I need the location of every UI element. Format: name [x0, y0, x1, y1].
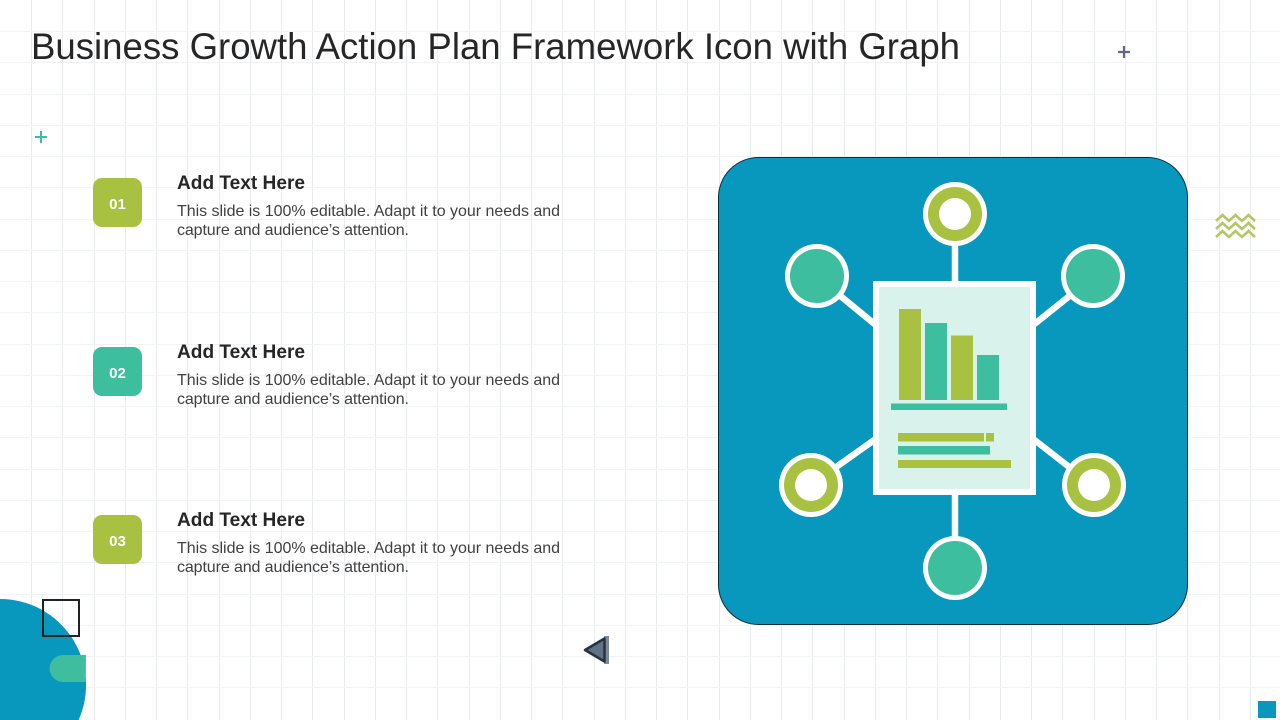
title: Business Growth Action Plan Framework Icon with Graph	[31, 26, 960, 67]
item 02	[93, 342, 560, 408]
text 03: capture and audience’s attention.	[177, 559, 409, 576]
badge 02	[93, 347, 142, 396]
node: top ring	[923, 182, 987, 246]
bar chart	[891, 309, 1007, 410]
node: bottom	[923, 536, 987, 600]
connectors	[832, 240, 1073, 545]
decoration: zigzag lines	[1216, 215, 1255, 237]
panel: network graph icon	[718, 158, 1188, 624]
text 01: This slide is 100% editable. Adapt it to your needs and	[177, 203, 560, 220]
badge 01	[93, 178, 142, 227]
text 03	[177, 540, 560, 576]
item 03	[93, 510, 560, 576]
decoration: outlined square	[43, 600, 79, 636]
badge 03: 03	[109, 533, 126, 550]
item 01	[93, 173, 560, 239]
badge 01: 01	[109, 196, 126, 213]
text 01: capture and audience’s attention.	[177, 222, 409, 239]
node: upper right	[1061, 244, 1125, 308]
heading 02: Add Text Here	[177, 342, 305, 363]
navigation arrow	[585, 636, 609, 664]
document with bar chart	[873, 281, 1036, 495]
heading 01: Add Text Here	[177, 173, 305, 194]
node: lower right ring	[1062, 453, 1126, 517]
decoration: grey plus	[1118, 46, 1130, 58]
badge 02: 02	[109, 365, 126, 382]
decoration: corner square	[1258, 701, 1276, 718]
node: lower left ring	[779, 453, 843, 517]
text 03: This slide is 100% editable. Adapt it to your needs and	[177, 540, 560, 557]
text 02: This slide is 100% editable. Adapt it to your needs and	[177, 372, 560, 389]
text lines	[898, 433, 1011, 468]
node: upper left	[785, 244, 849, 308]
badge 03	[93, 515, 142, 564]
decoration: teal plus	[35, 131, 47, 143]
text 02: capture and audience’s attention.	[177, 391, 409, 408]
text 01	[177, 203, 560, 239]
text 02	[177, 372, 560, 408]
heading 03: Add Text Here	[177, 510, 305, 531]
decoration: corner circle with pill	[0, 599, 86, 720]
